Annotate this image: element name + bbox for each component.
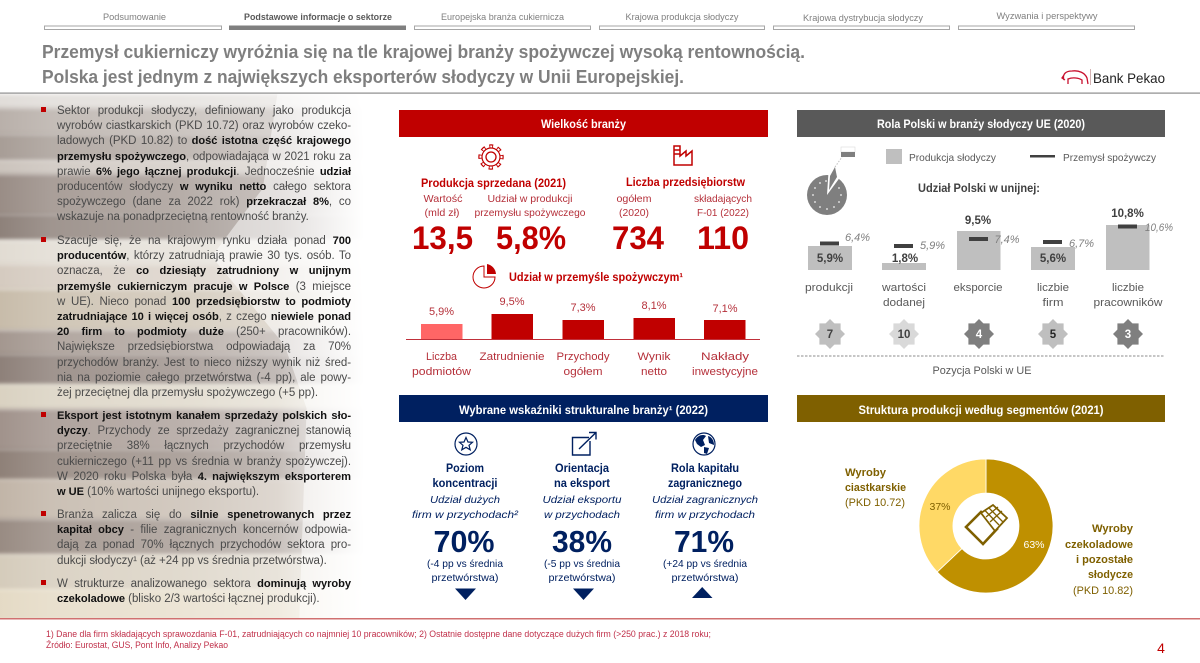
footnotes: 1) Dane dla firm składających sprawozdania F-01, zatrudniających co najmniej 10 pracowników; 2) Ostatnie dostępne dane dotyczące dużych firm (>250 prac.) z 2018 roku; xyxy=(46,629,711,639)
stat: liczba przedsiębiorstw: (2020) xyxy=(619,207,649,219)
donut values: 37% xyxy=(929,501,951,513)
text block: bullet 2: przemyśle cukierniczym pracuje w Polsce (3 miejsce xyxy=(57,281,351,293)
stat: produkcja sprzedana: 13,5 xyxy=(412,220,473,256)
column: Orientacja na eksport: przetwórstwa) xyxy=(548,572,616,584)
heading: Rola Polski xyxy=(797,110,1165,137)
text block: bullet 4: kapitał obcy - filie zagranicznych koncernów odpowia- xyxy=(57,524,351,536)
text block: bullet 3: cukierniczego (+11 pp vs średnia w branży spożywczej). xyxy=(57,456,351,468)
stat: liczba przedsiębiorstw: F-01 (2022) xyxy=(697,207,749,219)
rank badges: pozycja Polski xyxy=(815,319,1143,349)
legend: Produkcja słodyczy xyxy=(909,152,997,164)
navigation tabs: Wyzwania i perspektywy xyxy=(996,11,1098,22)
text block: bullet 2: Szacuje się, że na krajowym rynku działa ponad 700 xyxy=(57,235,351,247)
bar chart: udział Polski w unijnej: 6,7% xyxy=(1069,238,1094,250)
title: Przemysł cukierniczy wyróżnia się na tle krajowej branży spożywczej wysoką rentownością. xyxy=(42,42,805,62)
text block: bullet 2: oznacza, że co dziesiąty zatrudniony w unijnym xyxy=(57,265,351,277)
text block: bullet 2: 20 firm to podmioty duże (250+ pracowników). xyxy=(57,326,351,338)
column: Rola kapitału zagranicznego: 71% xyxy=(674,524,734,559)
column: Orientacja na eksport: (-5 pp vs średnia xyxy=(544,558,620,570)
text block: bullet 2: żej przeciętnej dla przemysłu spożywczego (+5 pp). xyxy=(57,387,318,399)
bar chart: udział Polski w unijnej: 6,4% xyxy=(845,232,870,244)
text block: bullet 1: wyrobów ciastkarskich (PKD 10.72) oraz wyrobów czeko- xyxy=(57,120,351,132)
navigation tabs: Europejska branża cukiernicza xyxy=(441,12,565,23)
heading: Wybrane wskaźniki xyxy=(399,395,768,422)
bar chart: udział w przemyśle: 9,5% xyxy=(499,296,525,308)
bar chart: udział w przemyśle: Przychody xyxy=(556,351,610,363)
text block: bullet 3: dyczy. Przychody ze sprzedaży zagranicznej stanowią xyxy=(57,425,351,437)
label: Wyroby ciastkarskie xyxy=(845,467,906,509)
column: Orientacja na eksport: 38% xyxy=(552,524,612,559)
bar chart: udział Polski w unijnej: 5,9% xyxy=(817,253,843,265)
text block: bullet 5 xyxy=(41,578,351,605)
rank badges: pozycja Polski: 4 xyxy=(976,329,983,341)
bar chart: udział Polski w unijnej: firm xyxy=(1042,297,1064,309)
text block: bullet 4: dają za ponad 70% łącznych przychodów sektora pro- xyxy=(57,539,351,551)
bar chart: udział Polski w unijnej: 5,9% xyxy=(920,240,945,252)
bar chart: udział w przemyśle: 8,1% xyxy=(641,300,667,312)
navigation tabs: Krajowa produkcja słodyczy xyxy=(626,12,739,23)
text block: bullet 3: w UE (10% wartości unijnego eksportu). xyxy=(57,486,259,498)
stat: liczba przedsiębiorstw: ogółem xyxy=(616,193,652,205)
bar chart: udział Polski w unijnej: wartości xyxy=(881,282,926,294)
label: Wyroby czekoladowe: słodycze xyxy=(1088,569,1133,581)
column: Poziom koncentracji: 70% xyxy=(434,524,494,559)
donut values xyxy=(929,501,1045,551)
footnotes xyxy=(46,629,711,650)
text block: bullet 1: producentów słodyczy w wyniku netto całego sektora xyxy=(57,181,351,193)
stat: produkcja sprzedana: Produkcja sprzedana (2021) xyxy=(421,178,566,190)
stat: produkcja sprzedana: 5,8% xyxy=(496,220,566,256)
navigation tabs xyxy=(44,11,1134,30)
text block: bullet 1: prawie 6% jego łącznej produkcji. Jednocześnie udział xyxy=(57,166,351,178)
column: Orientacja na eksport: na eksport xyxy=(554,478,610,490)
column: Poziom koncentracji: Udział dużych xyxy=(430,494,500,506)
legend xyxy=(886,149,1157,164)
donut values: 63% xyxy=(1023,539,1045,551)
text block: bullet 2: zatrudniające 10 i więcej osób, z czego niewiele ponad xyxy=(57,311,351,323)
panel: Rola Polski w branży słodyczy UE xyxy=(797,110,1173,377)
text block: bullet 1: wskazuje na ponadprzeciętną rentowność branży. xyxy=(57,211,309,223)
bar chart: udział Polski w unijnej: 10,8% xyxy=(1111,208,1144,220)
column: Poziom koncentracji: przetwórstwa) xyxy=(432,572,498,584)
bar chart: udział Polski w unijnej: pracowników xyxy=(1094,297,1163,309)
bar chart: udział w przemyśle: Nakłady xyxy=(701,351,750,363)
navigation tabs: Podstawowe informacje o sektorze xyxy=(244,12,392,23)
page number: 4 xyxy=(1157,640,1165,656)
column: Rola kapitału zagranicznego: firm w przychodach xyxy=(655,509,755,521)
column: Orientacja na eksport: Orientacja xyxy=(555,463,610,475)
legend: Przemysł spożywczy xyxy=(1063,152,1157,164)
heading: Rola Polski: Rola Polski w branży słodyczy UE (2020) xyxy=(877,119,1085,131)
navigation tabs: Podsumowanie xyxy=(103,12,166,23)
stat: liczba przedsiębiorstw: Liczba przedsiębiorstw xyxy=(626,177,745,189)
column: Rola kapitału zagranicznego: Rola kapitału xyxy=(671,463,739,475)
column: Poziom koncentracji xyxy=(412,463,519,600)
label: Wyroby czekoladowe: i pozostałe xyxy=(1076,554,1133,566)
bar chart: udział Polski w unijnej: 5,6% xyxy=(1040,253,1066,265)
label: Wyroby czekoladowe xyxy=(1065,523,1134,597)
text block: bullet 5: W strukturze analizowanego sektora dominują wyroby xyxy=(57,578,351,590)
panel: Struktura produkcji xyxy=(797,395,1165,597)
column: Orientacja na eksport: w przychodach xyxy=(544,509,620,521)
caption: Pozycja Polski w UE: Pozycja Polski w UE xyxy=(932,365,1032,377)
heading: Struktura produkcji xyxy=(797,395,1165,422)
bar chart: udział w przemyśle xyxy=(406,296,760,378)
text block: bullet 4: dukcji słodyczy¹ (aż +24 pp vs średnia przetwórstwa). xyxy=(57,555,327,567)
bar chart: udział w przemyśle: inwestycyjne xyxy=(692,366,758,378)
stat: liczba przedsiębiorstw xyxy=(612,177,752,256)
panel: Wielkość branży xyxy=(399,110,768,378)
title: Polska jest jednym z największych eksporterów słodyczy w Unii Europejskiej. xyxy=(42,67,684,87)
bar chart: udział w przemyśle: podmiotów xyxy=(412,366,471,378)
bar chart: udział Polski w unijnej: liczbie xyxy=(1112,282,1144,294)
text block: bullet 1: przemysłu spożywczego, odpowiadająca w 2021 roku za xyxy=(57,151,351,163)
stat: produkcja sprzedana: Wartość xyxy=(424,193,462,205)
bar chart: udział Polski w unijnej: 1,8% xyxy=(892,253,918,265)
text block: bullet 5: czekoladowe (blisko 2/3 wartości łącznej produkcji). xyxy=(57,593,320,605)
bar chart: udział Polski w unijnej: eksporcie xyxy=(954,282,1002,294)
text block: bullet 4 xyxy=(41,509,351,567)
text block: bullet 3: przeciętnie 38% łącznych przychodów przemysłu xyxy=(57,440,351,452)
text block: bullet 1: spożywczego (dane za 2022 rok) przekraczał 8%, co xyxy=(57,196,351,208)
rank badges: pozycja Polski: 3 xyxy=(1125,329,1131,341)
label: Wyroby czekoladowe: Wyroby xyxy=(1092,523,1134,535)
text block: bullet 3: Eksport jest istotnym kanałem sprzedaży polskich sło- xyxy=(57,410,351,422)
bar chart: udział Polski w unijnej: 10,6% xyxy=(1145,222,1173,234)
heading: Udział w przemyśle spożywczym: Udział w przemyśle spożywczym¹ xyxy=(509,272,683,284)
icon: factory xyxy=(674,146,692,165)
header rule xyxy=(0,92,1200,94)
column: Rola kapitału zagranicznego xyxy=(652,463,758,598)
text block: bullet 2: producentów, którzy zatrudniają prawie 30 tys. osób. To xyxy=(57,250,351,262)
icon: pie chart xyxy=(473,264,496,288)
column: Rola kapitału zagranicznego: zagranicznego xyxy=(668,478,742,490)
bar chart: udział Polski w unijnej: 9,5% xyxy=(965,215,991,227)
stat: liczba przedsiębiorstw: składających xyxy=(694,193,752,205)
icon: globe xyxy=(693,433,715,455)
heading: Struktura produkcji: Struktura produkcji według segmentów (2021) xyxy=(858,405,1104,417)
bar chart: udział w przemyśle: ogółem xyxy=(564,366,602,378)
stat: liczba przedsiębiorstw: 110 xyxy=(697,220,749,256)
donut chart xyxy=(919,459,1053,593)
bar chart: udział Polski w unijnej xyxy=(805,208,1173,309)
stat: liczba przedsiębiorstw: 734 xyxy=(612,220,664,256)
column: Rola kapitału zagranicznego: Udział zagranicznych xyxy=(652,494,758,506)
label: Wyroby czekoladowe: czekoladowe xyxy=(1065,539,1133,551)
bar chart: udział w przemyśle: Zatrudnienie xyxy=(480,351,544,363)
stat: produkcja sprzedana: Udział w produkcji xyxy=(488,193,572,205)
column: Poziom koncentracji: (-4 pp vs średnia xyxy=(427,558,503,570)
text block: bullet 1: Sektor produkcji słodyczy, definiowany jako produkcja xyxy=(57,105,351,117)
bar chart: udział Polski w unijnej: produkcji xyxy=(805,282,853,294)
heading: Wielkość branży xyxy=(399,110,768,137)
bar chart: udział Polski w unijnej: 7,4% xyxy=(994,234,1020,246)
label: Wyroby ciastkarskie: ciastkarskie xyxy=(845,482,906,494)
column: Poziom koncentracji: firm w przychodach² xyxy=(412,509,519,521)
icon: gear xyxy=(480,146,502,168)
logo: Bank Pekao xyxy=(1062,69,1165,86)
heading: Wybrane wskaźniki: Wybrane wskaźniki strukturalne branży¹ (2022) xyxy=(459,405,708,417)
panel: Wybrane wskaźniki strukturalne xyxy=(399,395,768,600)
bar chart: udział w przemyśle: Liczba xyxy=(426,351,458,363)
rank badges: pozycja Polski: 10 xyxy=(898,329,910,341)
text block: bullet 2 xyxy=(41,235,351,399)
icon: export arrow xyxy=(572,432,596,455)
rank badges: pozycja Polski: 7 xyxy=(827,329,833,341)
stat: produkcja sprzedana: przemysłu spożywczego xyxy=(474,207,586,219)
stat: produkcja sprzedana xyxy=(412,178,586,256)
icon: chocolate bar xyxy=(966,505,1007,544)
bar chart: udział w przemyśle: netto xyxy=(641,366,667,378)
column: Poziom koncentracji: Poziom xyxy=(446,463,484,475)
label: Wyroby czekoladowe: (PKD 10.82) xyxy=(1073,585,1133,597)
navigation tabs: Krajowa dystrybucja słodyczy xyxy=(803,13,923,24)
text block: bullet 2: Największe przedsiębiorstwa odpowiadają za 70% xyxy=(57,341,351,353)
background: chocolate photo, faded xyxy=(0,94,344,618)
column: Rola kapitału zagranicznego: (+24 pp vs średnia xyxy=(663,558,747,570)
column: Orientacja na eksport xyxy=(542,463,622,600)
icon: star in circle xyxy=(455,433,477,455)
text block: bullet 3: W 2020 roku Polska była 4. największym eksporterem xyxy=(57,471,351,483)
title xyxy=(42,42,805,87)
label: Wyroby ciastkarskie: Wyroby xyxy=(845,467,887,479)
bar chart: udział w przemyśle: 7,3% xyxy=(570,302,596,314)
text block: bullet 4: Branża zalicza się do silnie spenetrowanych przez xyxy=(57,509,351,521)
bar chart: udział w przemyśle: 7,1% xyxy=(712,303,738,315)
text block: bullet 2: w UE). Nieco ponad 100 przedsiębiorstw to podmioty xyxy=(57,296,351,308)
rank badges: pozycja Polski: 5 xyxy=(1050,329,1057,341)
bar chart: udział w przemyśle: Wynik xyxy=(638,351,671,363)
label: Wyroby ciastkarskie: (PKD 10.72) xyxy=(845,497,905,509)
bar chart: udział Polski w unijnej: liczbie xyxy=(1037,282,1069,294)
text block: bullet 2: przychodów branży. Jest to nieco niższy wynik niż śred- xyxy=(57,357,351,369)
bar chart: udział w przemyśle: 5,9% xyxy=(429,306,454,318)
text block: bullet 2: nia na poziomie całego przetwórstwa (-4 pp), ale powy- xyxy=(57,372,351,384)
column: Poziom koncentracji: koncentracji xyxy=(432,478,498,490)
heading: Wielkość branży: Wielkość branży xyxy=(541,119,627,131)
column: Rola kapitału zagranicznego: przetwórstwa) xyxy=(672,572,738,584)
text block: bullet 1: ladowych (PKD 10.82) to dość istotna część krajowego xyxy=(57,135,351,147)
column: Orientacja na eksport: Udział eksportu xyxy=(542,494,622,506)
bar chart: udział Polski w unijnej: dodanej xyxy=(883,297,925,309)
footnotes: Źródło: Eurostat, GUS, Pont Info, Analizy Pekao xyxy=(46,640,228,650)
text block: bullet 3 xyxy=(41,410,351,498)
text block: bullet 1 xyxy=(41,105,351,223)
icon: EU pie with Polish flag xyxy=(807,147,855,215)
footer rule xyxy=(0,618,1200,620)
logo: Bank Pekao: Bank Pekao xyxy=(1093,70,1165,86)
heading: Udział Polski w unijnej: Udział Polski w unijnej: xyxy=(918,183,1040,195)
stat: produkcja sprzedana: (mld zł) xyxy=(424,207,460,219)
